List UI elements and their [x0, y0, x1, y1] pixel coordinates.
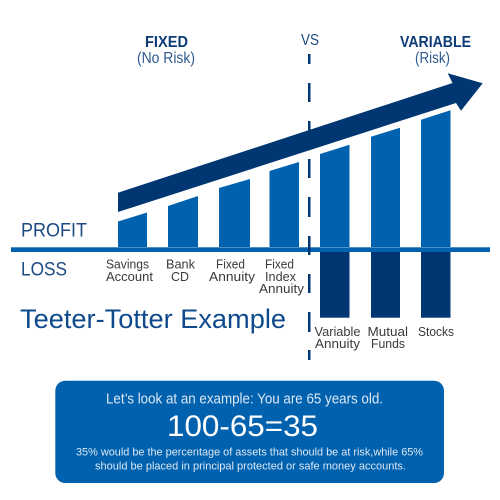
label: bank cd — [166, 257, 195, 284]
label: fixed index annuity: Fixed — [265, 257, 294, 272]
label: fixed index annuity — [259, 257, 305, 296]
label: variable annuity: Variable — [314, 324, 360, 339]
label: mutual funds: Funds — [371, 336, 405, 351]
heading: fixed: (No Risk) — [137, 50, 195, 67]
label: bank cd: CD — [171, 269, 189, 284]
arrow — [118, 73, 483, 212]
label: savings account: Savings — [106, 257, 149, 272]
dashed divider — [308, 54, 310, 360]
label: variable annuity: Annuity — [315, 336, 361, 351]
label: fixed index annuity: Index — [265, 269, 296, 284]
heading: fixed: FIXED — [145, 34, 188, 51]
label: stocks: Stocks — [418, 324, 454, 339]
label: mutual funds — [368, 324, 408, 351]
explanation — [76, 447, 423, 472]
dash over axis — [308, 236, 310, 255]
heading: versus: VS — [301, 32, 319, 49]
title: Teeter-Totter Example — [20, 304, 286, 334]
label: fixed index annuity: Annuity — [259, 281, 305, 296]
label: mutual funds: Mutual — [368, 324, 408, 339]
label: bank cd: Bank — [166, 257, 195, 272]
label: fixed annuity — [209, 257, 256, 284]
heading: variable — [400, 34, 471, 67]
explanation: 35% would be the percentage of assets that should be at risk,while 65% — [76, 447, 423, 459]
profit bars — [118, 110, 450, 247]
label: fixed annuity: Fixed — [216, 257, 245, 272]
explanation: should be placed in principal protected or safe money accounts. — [95, 460, 406, 472]
equation: 100-65=35 — [167, 410, 318, 443]
heading: fixed — [137, 34, 195, 67]
label: profit: PROFIT — [21, 221, 87, 242]
heading: variable: VARIABLE — [400, 34, 471, 51]
example intro: Let’s look at an example: You are 65 years old. — [106, 391, 383, 407]
axis line — [11, 247, 490, 252]
label: savings account: Account — [106, 269, 153, 284]
label: fixed annuity: Annuity — [209, 269, 256, 284]
loss bars — [320, 252, 450, 318]
heading: variable: (Risk) — [415, 50, 450, 67]
label: savings account — [106, 257, 153, 284]
label: variable annuity — [314, 324, 361, 351]
panel: example — [55, 381, 444, 483]
label: loss: LOSS — [21, 260, 67, 281]
